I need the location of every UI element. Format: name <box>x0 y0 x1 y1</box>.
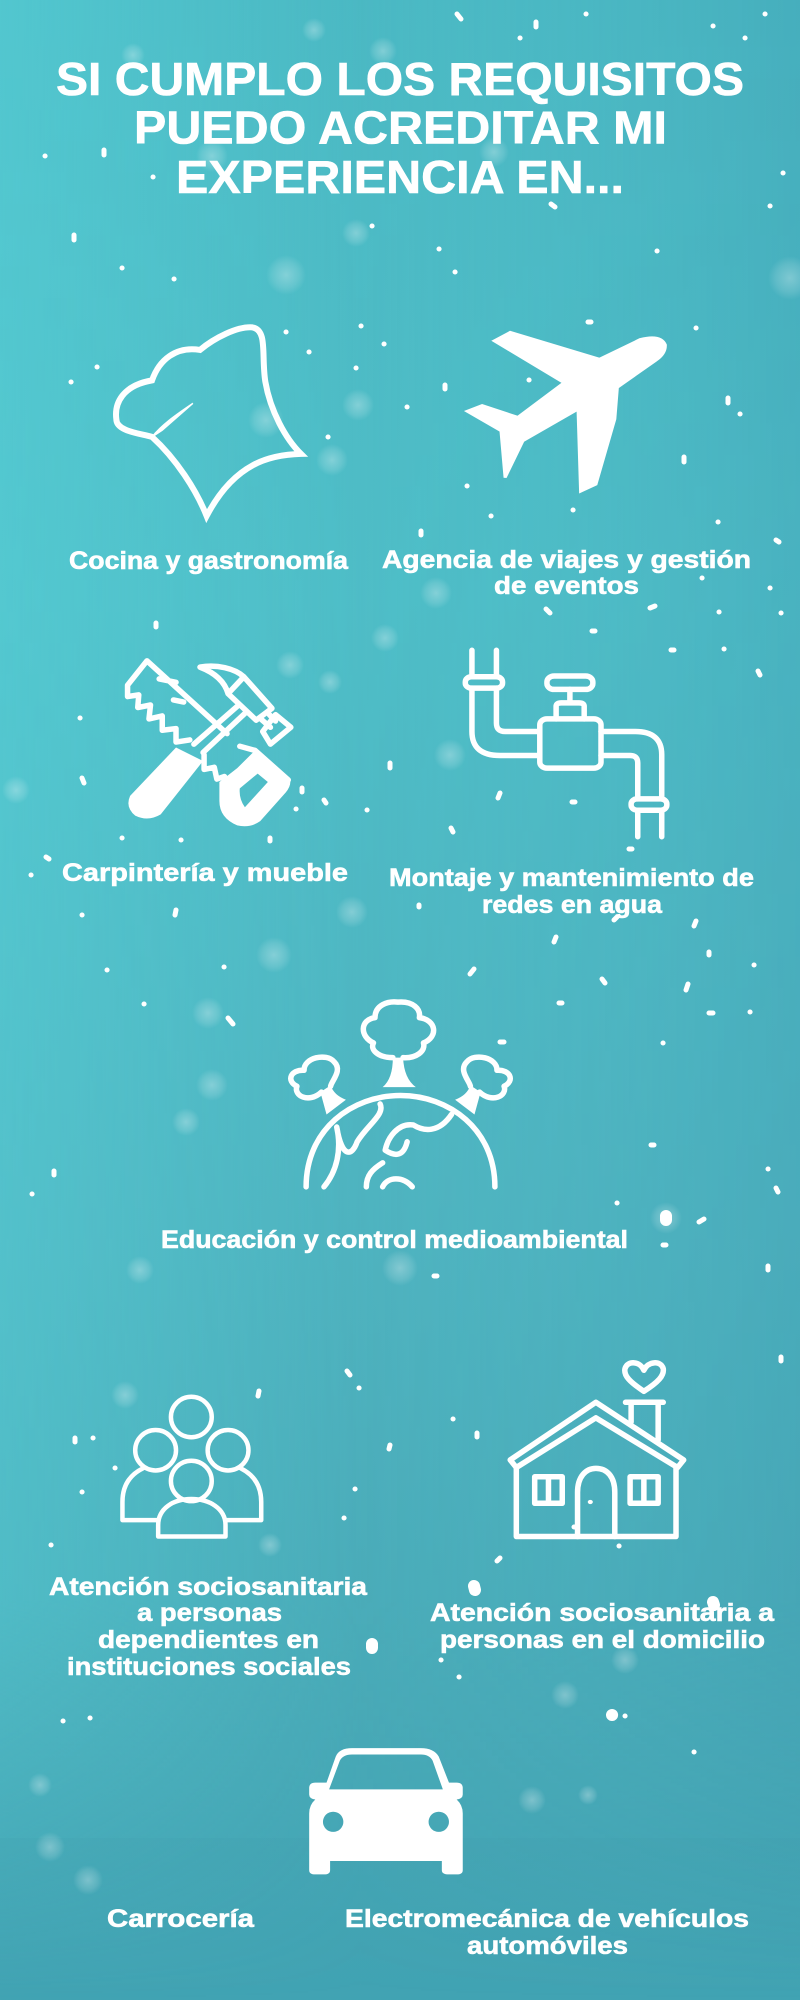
label: atencion socio sanitaria instituciones <box>49 1573 368 1681</box>
icon: saw and hammer <box>128 661 291 826</box>
label: agencia de viajes: Agencia de viajes y gestión <box>382 546 751 574</box>
title: EXPERIENCIA EN... <box>176 151 624 203</box>
title: PUEDO ACREDITAR MI <box>134 102 667 154</box>
label: atencion domicilio: Atención sociosanitaria a <box>430 1599 775 1627</box>
label: agencia de viajes: de eventos <box>494 572 639 600</box>
label: carpinteria: Carpintería y mueble <box>62 859 348 887</box>
label: electromecanica <box>345 1905 749 1960</box>
label: carroceria: Carrocería <box>107 1905 255 1933</box>
label: montaje y mantenimiento <box>389 864 754 919</box>
label: montaje y mantenimiento: redes en agua <box>482 891 663 919</box>
label: atencion socio sanitaria instituciones: Atención sociosanitaria <box>49 1573 368 1601</box>
label: atencion domicilio <box>430 1599 775 1654</box>
icon: water pipe and tap <box>465 650 667 837</box>
icon: planet with trees <box>291 1002 510 1187</box>
label: electromecanica: automóviles <box>467 1932 628 1960</box>
icon: house with heart <box>510 1363 684 1537</box>
title <box>56 53 744 203</box>
title: SI CUMPLO LOS REQUISITOS <box>56 53 744 105</box>
icon: chef hat <box>116 327 301 516</box>
label: educacion medioambiental: Educación y control medioambiental <box>161 1226 628 1254</box>
label: atencion socio sanitaria instituciones: instituciones sociales <box>67 1653 351 1681</box>
label: agencia de viajes <box>382 546 751 600</box>
icon: group of people <box>122 1397 261 1537</box>
label: atencion socio sanitaria instituciones: dependientes en <box>98 1626 319 1654</box>
label: electromecanica: Electromecánica de vehículos <box>345 1905 749 1933</box>
icon: car <box>309 1748 463 1874</box>
icon: airplane <box>467 332 665 491</box>
label: cocina: Cocina y gastronomía <box>69 547 349 575</box>
label: atencion domicilio: personas en el domicilio <box>440 1626 765 1654</box>
label: atencion socio sanitaria instituciones: a personas <box>137 1599 282 1627</box>
label: montaje y mantenimiento: Montaje y mantenimiento de <box>389 864 754 892</box>
